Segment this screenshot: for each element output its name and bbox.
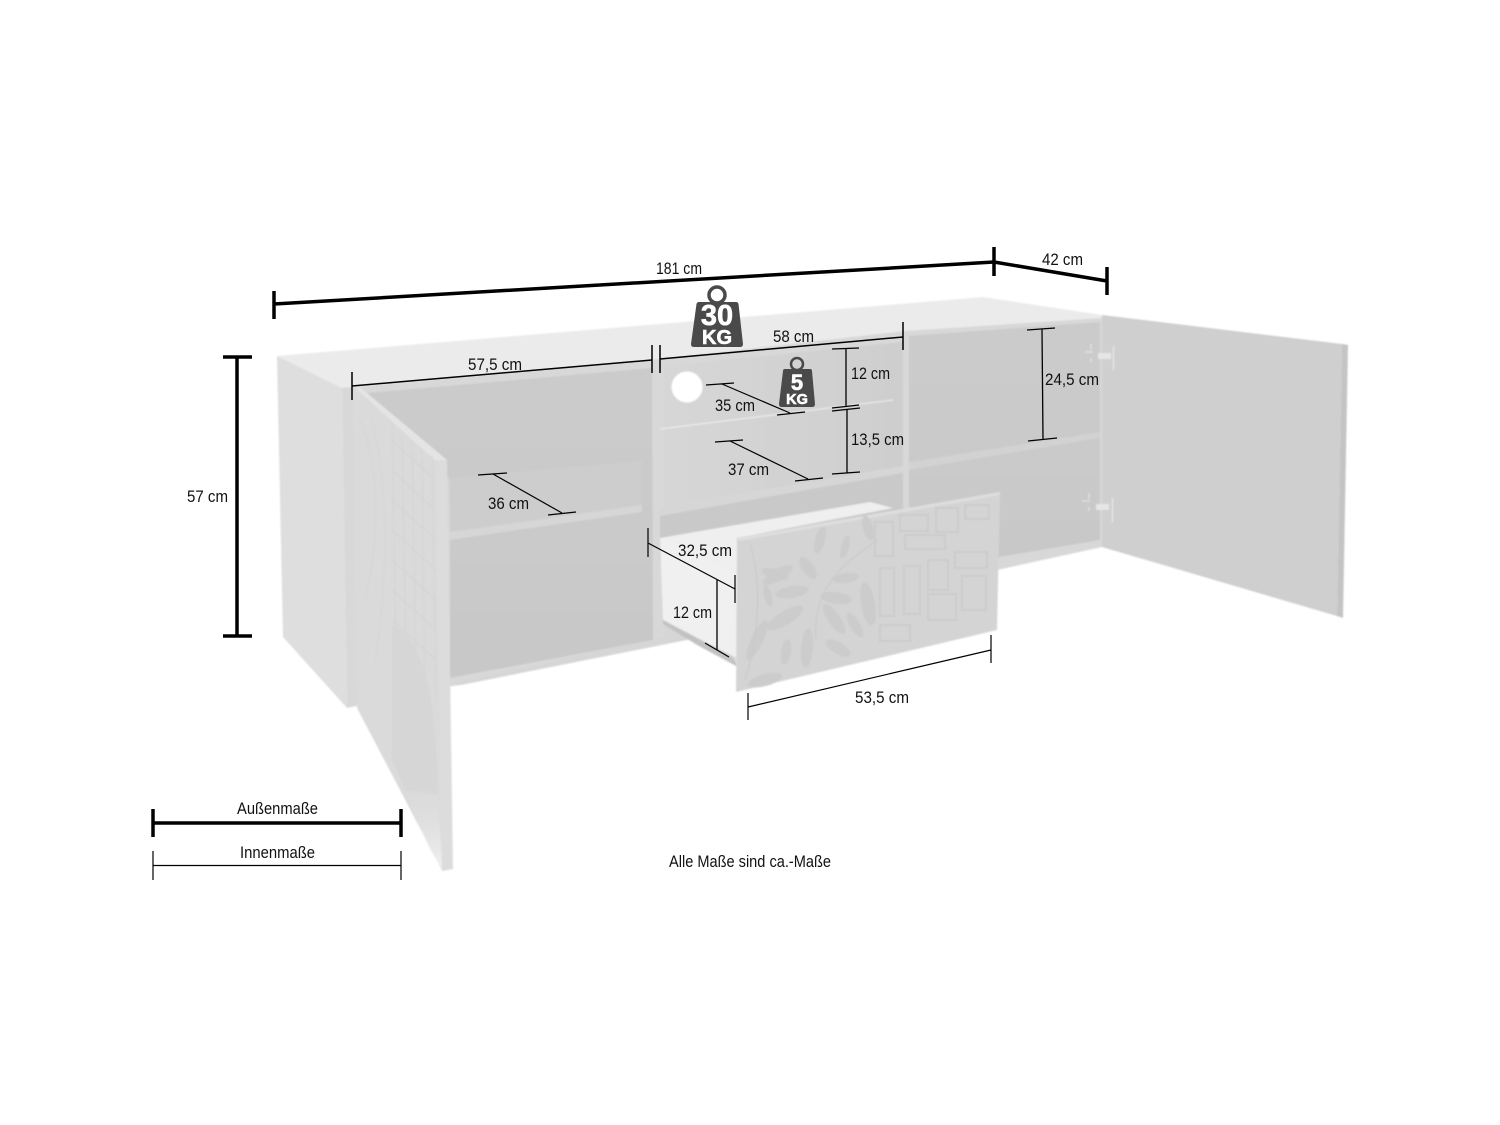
dimension: 57,5 cm inner width — [352, 345, 652, 400]
dimension: height 57 cm: 57 cm — [187, 487, 228, 506]
cabinet left side — [277, 356, 347, 708]
dimension: 37 cm shelf depth — [715, 440, 823, 481]
dimension: 58 cm inner width: 58 cm — [773, 327, 814, 346]
right door — [1082, 315, 1348, 618]
dimension: 24,5 cm right compartment: 24,5 cm — [1045, 370, 1099, 389]
glass shelf — [660, 400, 893, 429]
drawer geometric blocks — [875, 505, 989, 641]
left shelf — [449, 461, 642, 540]
dimension: 32,5 cm drawer depth — [648, 528, 735, 603]
door grid pattern — [392, 425, 436, 700]
bottom panel edge — [450, 640, 653, 686]
left door — [353, 386, 453, 871]
right bay back wall — [909, 322, 1100, 572]
white cut-out under the cabinet — [451, 638, 736, 700]
icon: 30 kg weight: KG — [702, 327, 732, 349]
dimension: 35 cm glass shelf depth: 35 cm — [715, 396, 755, 415]
icon: 30 kg weight: 30 — [701, 300, 733, 332]
center bay back wall — [665, 342, 903, 640]
dimension: 35 cm glass shelf depth — [706, 383, 805, 415]
legend: outer dimensions — [153, 799, 401, 837]
center lower compartment — [660, 473, 903, 560]
dimension: 58 cm inner width — [660, 322, 903, 373]
legend: inner dimensions: Innenmaße — [240, 843, 315, 862]
dimension: width 181 cm — [274, 247, 994, 319]
dimension: 53,5 cm drawer width — [748, 635, 991, 720]
dimension: depth 42 cm — [994, 250, 1107, 295]
dimension: 12 cm upper compartment: 12 cm — [851, 364, 890, 383]
footnote: Alle Maße sind ca.-Maße — [669, 852, 831, 871]
door wave pattern — [360, 420, 385, 660]
dimension: 53,5 cm drawer width: 53,5 cm — [855, 688, 909, 707]
drawer interior — [660, 502, 893, 666]
legend: outer dimensions: Außenmaße — [237, 799, 318, 818]
dimension: 36 cm shelf depth — [478, 473, 576, 515]
cabinet top surface — [277, 297, 1102, 392]
right shelf — [909, 432, 1100, 470]
dimension: depth 42 cm: 42 cm — [1042, 250, 1083, 269]
icon: 5 kg weight — [779, 358, 815, 408]
dimension: 32,5 cm drawer depth: 32,5 cm — [678, 541, 732, 560]
dimension: 12 cm upper compartment — [832, 348, 890, 408]
dimension: 13,5 cm lower compartment: 13,5 cm — [851, 430, 904, 449]
upper hinge — [1085, 344, 1114, 370]
icon: 5 kg weight: KG — [786, 392, 808, 408]
drawer leaves — [742, 514, 879, 690]
door edge — [353, 386, 447, 462]
dimension: 13,5 cm lower compartment — [832, 408, 904, 474]
dimension: 37 cm shelf depth: 37 cm — [728, 460, 769, 479]
icon: 30 kg weight — [691, 287, 743, 349]
dimension: width 181 cm: 181 cm — [656, 259, 702, 278]
left bay back wall — [367, 368, 653, 678]
cable hole — [672, 372, 702, 402]
lower hinge — [1082, 493, 1113, 522]
furniture: TV cabinet — [277, 297, 1348, 871]
center lower shelf — [660, 466, 903, 516]
dimension: height 57 cm — [187, 357, 252, 636]
dimension: 24,5 cm right compartment — [1027, 328, 1099, 441]
left lower drawer side background — [451, 625, 740, 686]
dimension: 12 cm drawer height: 12 cm — [673, 603, 712, 622]
legend: inner dimensions — [153, 843, 401, 880]
drawer front with leaf pattern — [736, 492, 1000, 692]
cabinet front frame — [342, 318, 1102, 708]
dimension: 36 cm shelf depth: 36 cm — [488, 494, 529, 513]
icon: 5 kg weight: 5 — [791, 370, 803, 395]
dimension: 57,5 cm inner width: 57,5 cm — [468, 355, 522, 374]
drawer stem — [745, 540, 878, 680]
dimension: 12 cm drawer height — [673, 580, 729, 657]
